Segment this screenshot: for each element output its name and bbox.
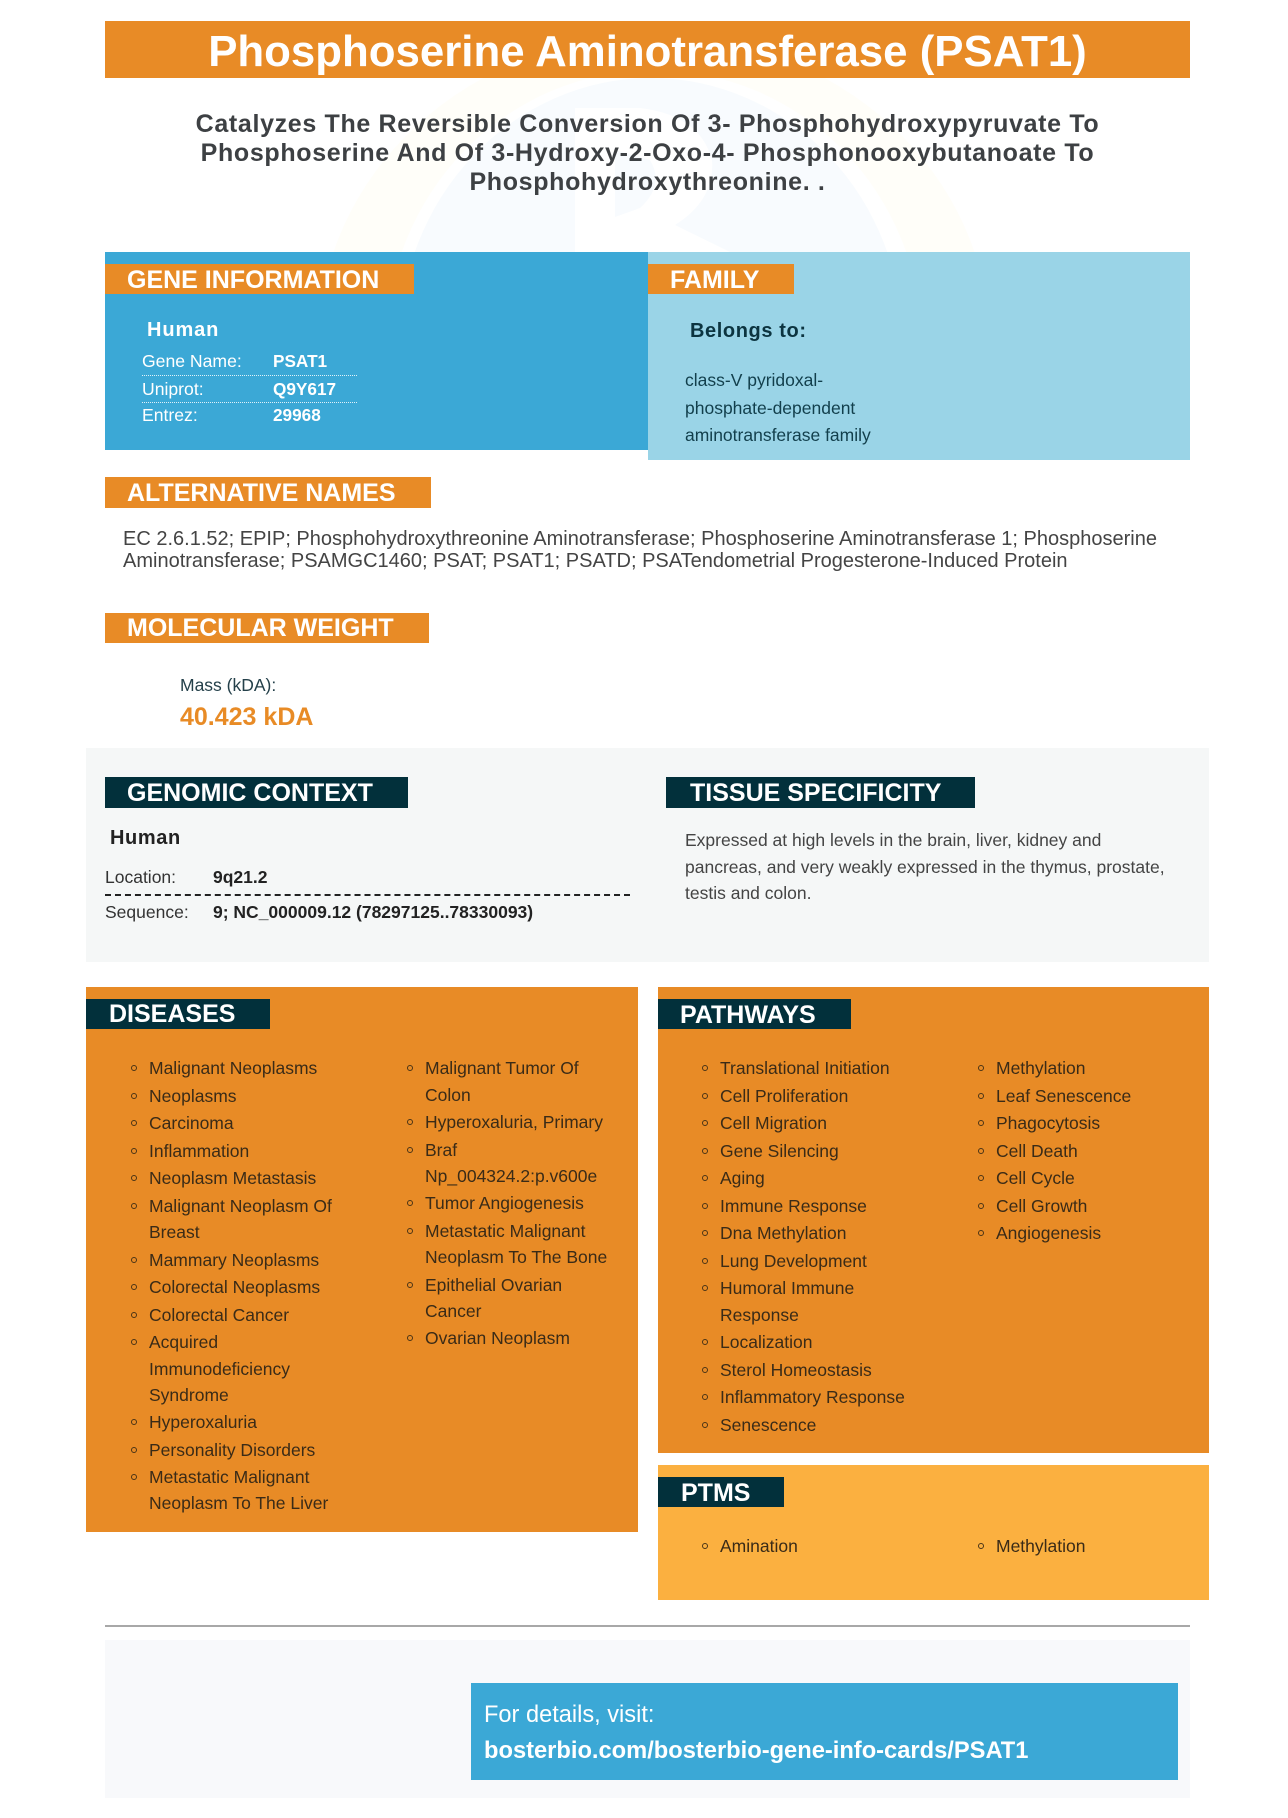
gene name row: PSAT1 — [273, 351, 327, 371]
pathways list column 2: Leaf Senescence — [996, 1086, 1131, 1106]
panel: pathways — [658, 987, 1209, 1453]
heading: pathways — [658, 999, 851, 1029]
species label: Human — [147, 319, 219, 341]
watermark logo — [300, 60, 1000, 260]
tissue specificity text — [685, 830, 1165, 903]
callout: details link — [471, 1683, 1178, 1780]
panel: diseases — [86, 987, 638, 1532]
pathways list column 1: Lung Development — [720, 1251, 867, 1271]
diseases list column 2: Metastatic Malignant — [425, 1221, 586, 1241]
entrez row: Entrez: — [142, 405, 198, 425]
ptm item: amination: Amination — [720, 1536, 798, 1556]
uniprot row: Uniprot: — [142, 379, 204, 399]
diseases list column 2: Colon — [425, 1085, 471, 1105]
tissue specificity text: pancreas, and very weakly expressed in the thymus, prostate, — [685, 856, 1165, 876]
belongs to label: Belongs to: — [690, 320, 807, 342]
diseases list column 1: Neoplasm To The Liver — [149, 1493, 328, 1513]
heading: genomic context: GENOMIC CONTEXT — [127, 779, 373, 807]
subtitle description: Catalyzes The Reversible Conversion Of 3- Phosphohydroxypyruvate To — [196, 110, 1099, 138]
heading: family — [648, 264, 794, 294]
pathways list column 1: Immune Response — [720, 1196, 867, 1216]
diseases list column 2: Epithelial Ovarian — [425, 1275, 562, 1295]
alternative names text: Aminotransferase; PSAMGC1460; PSAT; PSAT1; PSATD; PSATendometrial Progesterone-Induced Protein — [123, 550, 1068, 572]
heading: molecular weight: MOLECULAR WEIGHT — [127, 614, 394, 642]
gene name row — [142, 346, 357, 376]
subtitle description: Phosphohydroxythreonine. . — [469, 168, 826, 196]
footer divider line — [105, 1625, 1190, 1627]
diseases list column 1: Neoplasm Metastasis — [149, 1168, 316, 1188]
family text: aminotransferase family — [685, 425, 871, 445]
sequence row: 9; NC_000009.12 (78297125..78330093) — [213, 902, 533, 922]
family text: class-V pyridoxal- — [685, 370, 823, 390]
mass label: Mass (kDA): — [180, 675, 276, 695]
sequence row: Sequence: — [105, 902, 189, 922]
diseases list column 1: Syndrome — [149, 1385, 229, 1405]
diseases list column 2 — [407, 1058, 607, 1348]
heading: tissue specificity: TISSUE SPECIFICITY — [690, 779, 941, 807]
diseases list column 2: Cancer — [425, 1301, 481, 1321]
diseases list column 2: Tumor Angiogenesis — [425, 1193, 584, 1213]
heading: ptms: PTMS — [681, 1479, 750, 1507]
pathways list column 2: Cell Cycle — [996, 1168, 1075, 1188]
uniprot row — [142, 373, 357, 403]
diseases list column 1: Malignant Neoplasms — [149, 1058, 317, 1078]
title banner — [105, 21, 1190, 78]
diseases list column 1 — [131, 1058, 332, 1513]
diseases list column 1: Neoplasms — [149, 1086, 237, 1106]
pathways list column 1: Translational Initiation — [720, 1058, 890, 1078]
callout url: bosterbio.com/bosterbio-gene-info-cards/PSAT1 — [484, 1738, 1028, 1764]
diseases list column 2: Ovarian Neoplasm — [425, 1328, 570, 1348]
heading: gene information: GENE INFORMATION — [127, 266, 379, 294]
diseases list column 1: Colorectal Neoplasms — [149, 1277, 320, 1297]
pathways list column 2: Phagocytosis — [996, 1113, 1100, 1133]
diseases list column 1: Carcinoma — [149, 1113, 234, 1133]
diseases list column 2: Malignant Tumor Of — [425, 1058, 579, 1078]
pathways list column 1: Dna Methylation — [720, 1223, 846, 1243]
mass value: 40.423 kDA — [180, 703, 313, 731]
diseases list column 1: Personality Disorders — [149, 1440, 315, 1460]
pathways list column 1: Aging — [720, 1168, 765, 1188]
panel: gene information — [105, 252, 648, 450]
tissue specificity text: Expressed at high levels in the brain, liver, kidney and — [685, 830, 1101, 850]
pathways list column 1: Sterol Homeostasis — [720, 1360, 872, 1380]
gene name row: Gene Name: — [142, 351, 242, 371]
pathways list column 1: Response — [720, 1305, 799, 1325]
alternative names text — [123, 528, 1157, 572]
diseases list column 1: Immunodeficiency — [149, 1358, 290, 1378]
diseases list column 1: Colorectal Cancer — [149, 1305, 289, 1325]
heading: family: FAMILY — [670, 266, 759, 294]
subtitle description — [196, 110, 1099, 196]
heading: ptms — [658, 1477, 784, 1507]
pathways list column 2: Cell Death — [996, 1141, 1078, 1161]
pathways list column 2 — [978, 1058, 1131, 1243]
species label: Human — [110, 827, 181, 849]
family text: phosphate-dependent — [685, 398, 855, 418]
diseases list column 1: Inflammation — [149, 1141, 249, 1161]
diseases list column 1: Malignant Neoplasm Of — [149, 1196, 332, 1216]
entrez row: 29968 — [273, 405, 321, 425]
diseases list column 1: Breast — [149, 1222, 200, 1242]
pathways list column 1: Localization — [720, 1332, 812, 1352]
diseases list column 1: Hyperoxaluria — [149, 1412, 257, 1432]
pathways list column 1: Senescence — [720, 1415, 816, 1435]
diseases list column 2: Hyperoxaluria, Primary — [425, 1112, 603, 1132]
pathways list column 1: Cell Proliferation — [720, 1086, 848, 1106]
pathways list column 1: Gene Silencing — [720, 1141, 839, 1161]
pathways list column 2: Cell Growth — [996, 1196, 1087, 1216]
heading: pathways: PATHWAYS — [680, 1001, 816, 1029]
pathways list column 1: Cell Migration — [720, 1113, 827, 1133]
panel: ptms — [658, 1465, 1209, 1600]
diseases list column 1: Mammary Neoplasms — [149, 1250, 319, 1270]
diseases list column 1: Metastatic Malignant — [149, 1467, 310, 1487]
alternative names text: EC 2.6.1.52; EPIP; Phosphohydroxythreonine Aminotransferase; Phosphoserine Aminotransferase 1; Phosphoserine — [123, 528, 1157, 550]
tissue specificity text: testis and colon. — [685, 883, 811, 903]
diseases list column 1: Acquired — [149, 1332, 218, 1352]
pathways list column 1 — [702, 1058, 905, 1435]
entrez row — [142, 405, 321, 425]
family text — [685, 370, 871, 445]
panel: family — [648, 252, 1190, 460]
title banner: Phosphoserine Aminotransferase (PSAT1) — [208, 27, 1087, 76]
diseases list column 2: Np_004324.2:p.v600e — [425, 1166, 597, 1186]
diseases list column 2: Braf — [425, 1140, 457, 1160]
diseases list column 2: Neoplasm To The Bone — [425, 1247, 607, 1267]
location row: 9q21.2 — [213, 867, 267, 887]
uniprot row: Q9Y617 — [273, 379, 336, 399]
ptm item: methylation: Methylation — [996, 1536, 1086, 1556]
location row — [105, 861, 630, 896]
pathways list column 1: Inflammatory Response — [720, 1387, 905, 1407]
pathways list column 2: Methylation — [996, 1058, 1086, 1078]
heading: diseases — [86, 999, 270, 1029]
location row: Location: — [105, 867, 176, 887]
callout label: For details, visit: — [484, 1702, 654, 1728]
panel: footer — [105, 1640, 1190, 1798]
pathways list column 2: Angiogenesis — [996, 1223, 1101, 1243]
panel: genomic context and tissue specificity — [86, 748, 1209, 962]
heading: alternative names: ALTERNATIVE NAMES — [127, 479, 396, 507]
subtitle description: Phosphoserine And Of 3-Hydroxy-2-Oxo-4- Phosphonooxybutanoate To — [201, 139, 1094, 167]
pathways list column 1: Humoral Immune — [720, 1278, 854, 1298]
heading: diseases: DISEASES — [109, 1000, 235, 1028]
